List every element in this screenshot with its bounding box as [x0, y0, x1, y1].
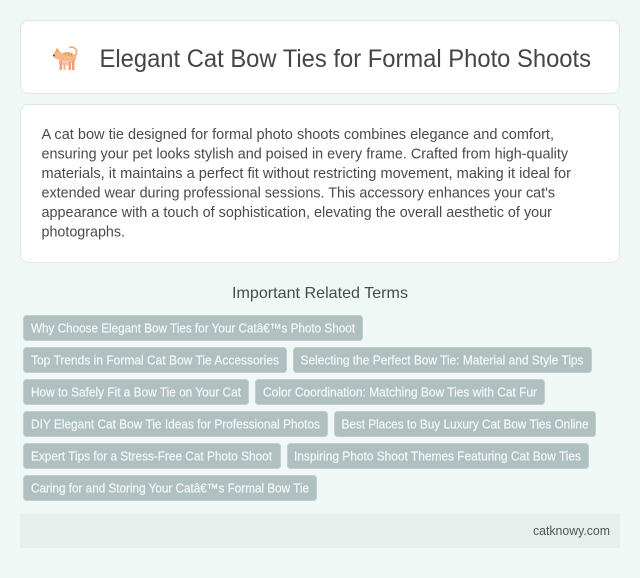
- description text: photographs.: [42, 224, 125, 240]
- description text: A cat bow tie designed for formal photo shoots combines elegance and comfort,: [42, 127, 554, 143]
- tag: Top Trends in Formal Cat Bow Tie Accessories: [31, 354, 279, 368]
- description text: materials, it maintains a perfect fit without restricting movement, making it ideal for: [42, 166, 571, 182]
- tag: [24, 348, 286, 372]
- tag: [294, 348, 592, 372]
- tag: Color Coordination: Matching Bow Ties with Cat Fur: [263, 386, 537, 400]
- description text: ensuring your pet looks stylish and poised in every frame. Crafted from high-quality: [42, 146, 569, 162]
- tag: [24, 380, 248, 404]
- tag: DIY Elegant Cat Bow Tie Ideas for Professional Photos: [31, 418, 320, 432]
- tag: [24, 476, 316, 500]
- tag: [256, 380, 544, 404]
- footer: [20, 514, 620, 548]
- tag: [334, 412, 596, 436]
- tag: Inspiring Photo Shoot Themes Featuring Cat Bow Ties: [294, 450, 581, 464]
- tag: How to Safely Fit a Bow Tie on Your Cat: [31, 386, 241, 400]
- tag: Best Places to Buy Luxury Cat Bow Ties Online: [342, 418, 589, 432]
- heading: related terms: Important Related Terms: [232, 285, 408, 302]
- tag: [24, 444, 280, 468]
- tag: [24, 412, 328, 436]
- icon: cat: [53, 47, 77, 70]
- tag: Expert Tips for a Stress-Free Cat Photo Shoot: [31, 450, 272, 464]
- tag: Caring for and Storing Your Catâ€™s Formal Bow Tie: [31, 482, 309, 496]
- description text: appearance with a touch of sophistication, elevating the overall aesthetic of your: [42, 205, 552, 221]
- description text: [42, 127, 571, 240]
- panel: title card: [20, 20, 620, 94]
- tag: [24, 316, 362, 340]
- tag: Selecting the Perfect Bow Tie: Material and Style Tips: [300, 354, 584, 368]
- title: Elegant Cat Bow Ties for Formal Photo Shoots: [100, 45, 591, 73]
- panel: description: [20, 104, 620, 262]
- footer site name: catknowy.com: [533, 524, 610, 538]
- related term tags: [24, 316, 596, 500]
- description text: extended wear during professional sessions. This accessory enhances your cat's: [42, 186, 555, 202]
- tag: Why Choose Elegant Bow Ties for Your Catâ€™s Photo Shoot: [31, 322, 355, 336]
- tag: [288, 444, 588, 468]
